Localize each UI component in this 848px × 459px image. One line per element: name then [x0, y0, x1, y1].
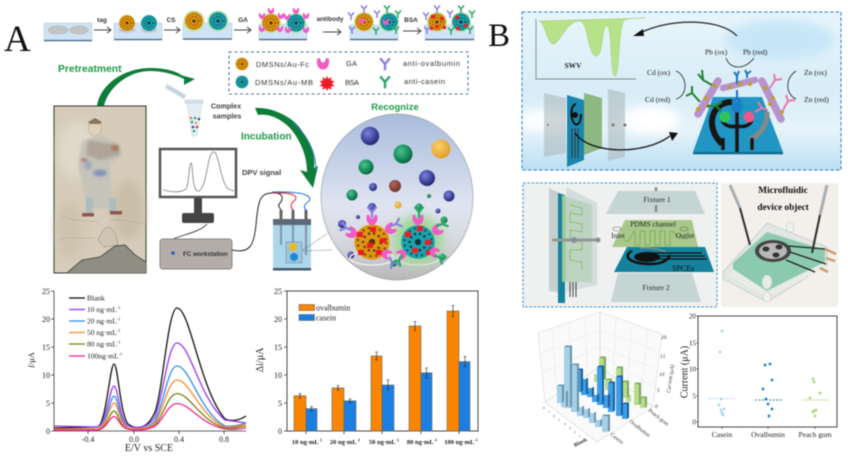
panel label: B: B: [488, 18, 510, 54]
redox labels: Pb (ox): [705, 48, 728, 56]
SWV plot: [536, 18, 645, 79]
curves: [54, 308, 246, 428]
chart: DPV curves: Blank: [87, 294, 105, 302]
step: tagged particles: [114, 15, 162, 40]
light blue row: casein: [557, 346, 610, 432]
text: DPV signal: DPV signal: [242, 168, 281, 177]
PDMS channel: Inlet: [611, 231, 626, 240]
3D axis labels: 3: [569, 426, 571, 430]
FC workstation: FC workstation: [183, 251, 228, 258]
redox labels: Cd (ox): [647, 68, 671, 77]
green row: peach gum: [594, 356, 647, 408]
panel: electrode modification workflow: [44, 6, 475, 41]
axis labels: -0.4: [82, 435, 94, 444]
axis labels: 0: [46, 427, 50, 436]
chart: DPV curves: 80 ng·mL: [87, 340, 117, 348]
chart walls: [538, 312, 662, 442]
redox labels: Cd (red): [645, 95, 671, 104]
bubble: recognition close-up: [321, 114, 473, 280]
photo: microfluidic device: device object: [757, 203, 810, 213]
icon: sample tube: [165, 84, 203, 136]
chart: scatter plot: Peach gum: [798, 430, 832, 439]
chart: DPV curves: 50 ng·mL: [87, 328, 117, 337]
axis labels: 0.0: [129, 435, 139, 444]
chart: 3D bar chart: [538, 312, 676, 449]
redox labels: Zn (red): [804, 95, 829, 104]
step: glutaraldehyde: [259, 8, 309, 40]
electrode spots: [350, 251, 439, 265]
redox labels: Zn (ox): [804, 68, 827, 77]
legend: [229, 52, 468, 94]
step: BSA blocked: [423, 6, 475, 40]
electrochemical cell with wires: [232, 192, 332, 270]
exploded device layers: [544, 89, 626, 167]
chart: scatter plot: Ovalbumin: [751, 430, 785, 439]
arrow: CS: CS: [166, 17, 176, 24]
3D axis labels: 8: [543, 406, 545, 410]
arrow: BSA: [403, 17, 421, 34]
legend: DMSNs/Au-Fc: [256, 60, 309, 69]
3D axis labels: Ovalbumin: [628, 419, 651, 439]
panel label: A: A: [4, 19, 31, 60]
SPCE electrode: SPCEs: [672, 264, 694, 273]
assembled stack: [549, 187, 600, 303]
text: complex samples: samples: [213, 112, 241, 120]
chart: scatter plot: Casein: [712, 430, 732, 439]
legend: DMSNs/Au-MB: [255, 78, 313, 87]
3D axis labels: 2: [574, 430, 576, 434]
3D axis labels: Current (μA): [665, 364, 676, 393]
legend: GA: [346, 59, 357, 68]
casein points: [709, 330, 735, 416]
blue row: ovalbumin: [576, 366, 629, 419]
chart: scatter plot: [680, 312, 837, 439]
bar legend: casein: [316, 314, 336, 322]
chart: scatter plot: 20: [689, 312, 696, 320]
heading: Incubation: Incubation: [241, 132, 292, 142]
chart: peak current bars: 15: [274, 343, 282, 352]
legend: BSA: [345, 78, 359, 87]
category labels: 80 ng·mL: [407, 439, 434, 446]
error bars: [298, 306, 466, 411]
category labels: -1: [319, 438, 322, 442]
curve legend: [69, 298, 85, 356]
3D axis labels: 15: [660, 354, 666, 360]
step: antibody immobilised: [348, 6, 401, 40]
PDMS channel: [611, 220, 698, 247]
arrow: antibody: antibody: [316, 16, 344, 23]
SWV plot: SWV: [564, 61, 582, 70]
redox labels: [645, 48, 829, 104]
chart: DPV curves: I/μA: [26, 351, 36, 369]
3D axis labels: 10: [659, 372, 665, 378]
teal nanoparticle: [392, 207, 448, 267]
axes: [51, 291, 246, 434]
3D axis labels: 7: [548, 410, 550, 414]
fixture 1: [606, 187, 705, 214]
photo: microfluidic device: [721, 183, 838, 307]
chart: DPV curves: -1: [117, 340, 121, 344]
photo: microfluidic device: Microfluidic: [758, 186, 808, 196]
arrow: antibody: [316, 16, 344, 35]
arrow: BSA: BSA: [404, 17, 418, 24]
chart: peak current bars: 5: [278, 399, 282, 408]
3D axis labels: 6: [553, 414, 555, 418]
axis labels: 10: [42, 371, 50, 380]
bars: [294, 396, 306, 431]
category labels: -1: [357, 438, 360, 442]
arrow: CS: [164, 17, 180, 33]
category labels: 20 ng·mL: [330, 439, 357, 446]
electrode with antibodies: [686, 70, 795, 154]
chart: peak current bars: 10: [274, 371, 282, 380]
chart: DPV curves: E/V vs SCE: [125, 443, 173, 454]
painted artifact sample: [54, 106, 146, 273]
chart: DPV curves: 10 ng·mL: [87, 305, 117, 314]
axis labels: 5: [46, 399, 50, 408]
chart: scatter plot: Current (μA): [680, 346, 690, 398]
monitor: DPV signal: [160, 149, 236, 223]
FC workstation: [160, 239, 232, 269]
axis labels: 25: [42, 287, 50, 296]
3D axis labels: 5: [558, 418, 560, 422]
arrow: tag: [94, 17, 111, 33]
chart: DPV curves: -1: [117, 328, 121, 333]
chart: DPV curves: 20 ng·mL: [87, 316, 117, 326]
axis labels: [42, 287, 229, 444]
3D axis labels: 5: [657, 388, 660, 394]
category labels: [292, 438, 478, 446]
PDMS channel: PDMS channel: [630, 220, 676, 228]
arrow: pretreatment: [97, 68, 195, 106]
chart: peak current bars: 0: [278, 427, 282, 436]
bar legend: ovalbumin: [316, 304, 350, 312]
step: bare electrode: [44, 23, 92, 41]
heading: Recognize: Recognize: [371, 102, 419, 113]
panel: SWV sensing scheme: [517, 12, 841, 170]
chart: DPV curves: -1: [117, 316, 121, 322]
category labels: 50 ng·mL: [369, 439, 396, 446]
fixture 1: Fixture 1: [643, 195, 671, 204]
chart: peak current bars: [255, 287, 478, 446]
category labels: -1: [474, 438, 478, 442]
chart: DPV curves: -1: [119, 352, 122, 356]
chart: peak current bars: 20: [274, 315, 282, 324]
category labels: 10 ng·mL: [292, 439, 319, 446]
3D axis labels: 20: [661, 335, 667, 341]
bar legend: [299, 304, 350, 322]
arrow: GA: [234, 17, 251, 33]
axis labels: 20: [42, 315, 50, 324]
arrow: to electrode: [575, 132, 678, 150]
axis labels: 0.8: [219, 435, 229, 444]
arrow: tag: tag: [97, 17, 107, 24]
axis labels: 0.4: [174, 435, 184, 444]
3D axis labels: 4: [564, 422, 566, 426]
panel: microfluidic device exploded view: [523, 183, 717, 307]
chart: DPV curves: [26, 287, 246, 454]
3D axis labels: Blank: [573, 436, 589, 449]
redox arrows: [676, 58, 796, 99]
step: chitosan coating: [183, 10, 232, 40]
heading: Pretreatment: Pretreatment: [58, 64, 122, 75]
arrow: incubation: [255, 108, 318, 188]
analyte spheres: [338, 127, 454, 266]
3D axis labels: Casein: [609, 432, 624, 446]
chart: DPV curves: -1: [117, 305, 121, 310]
SPCE electrode: [614, 247, 714, 273]
category labels: -1: [434, 438, 437, 442]
chart: DPV curves: 100ng·mL: [87, 352, 119, 360]
3D axis labels: 0: [655, 404, 658, 410]
fixture 2: Fixture 2: [642, 283, 670, 292]
chart: scatter plot: 10: [689, 366, 696, 374]
fixture 2: [611, 273, 701, 302]
PDMS channel: Outlet: [676, 231, 695, 240]
axis labels: 15: [42, 343, 50, 352]
3D axis labels: [543, 335, 676, 449]
redox labels: Pb (red): [743, 48, 768, 56]
chart: scatter plot: 0: [692, 418, 696, 426]
peach gum points: [802, 378, 829, 417]
ovalbumin points: [755, 363, 782, 417]
text: complex samples: Complex: [211, 102, 241, 110]
chart: peak current bars: 25: [274, 287, 282, 296]
legend: anti-casein: [404, 77, 445, 86]
legend: anti-ovalbumin: [403, 59, 460, 68]
chart: peak current bars: Δi/μA: [255, 347, 266, 372]
chart: scatter plot: 15: [689, 340, 696, 348]
category labels: 100 ng·mL: [444, 439, 474, 446]
orange nanoparticle: [340, 207, 402, 269]
3D axis labels: Peach gum: [647, 408, 670, 428]
cable: monitor to workstation: [173, 224, 207, 239]
arrow: to SWV: [633, 22, 737, 36]
category labels: -1: [396, 438, 399, 442]
chart: scatter plot: 5: [692, 392, 696, 400]
arrow: GA: GA: [238, 17, 248, 24]
3D axis labels: 1: [579, 434, 581, 438]
